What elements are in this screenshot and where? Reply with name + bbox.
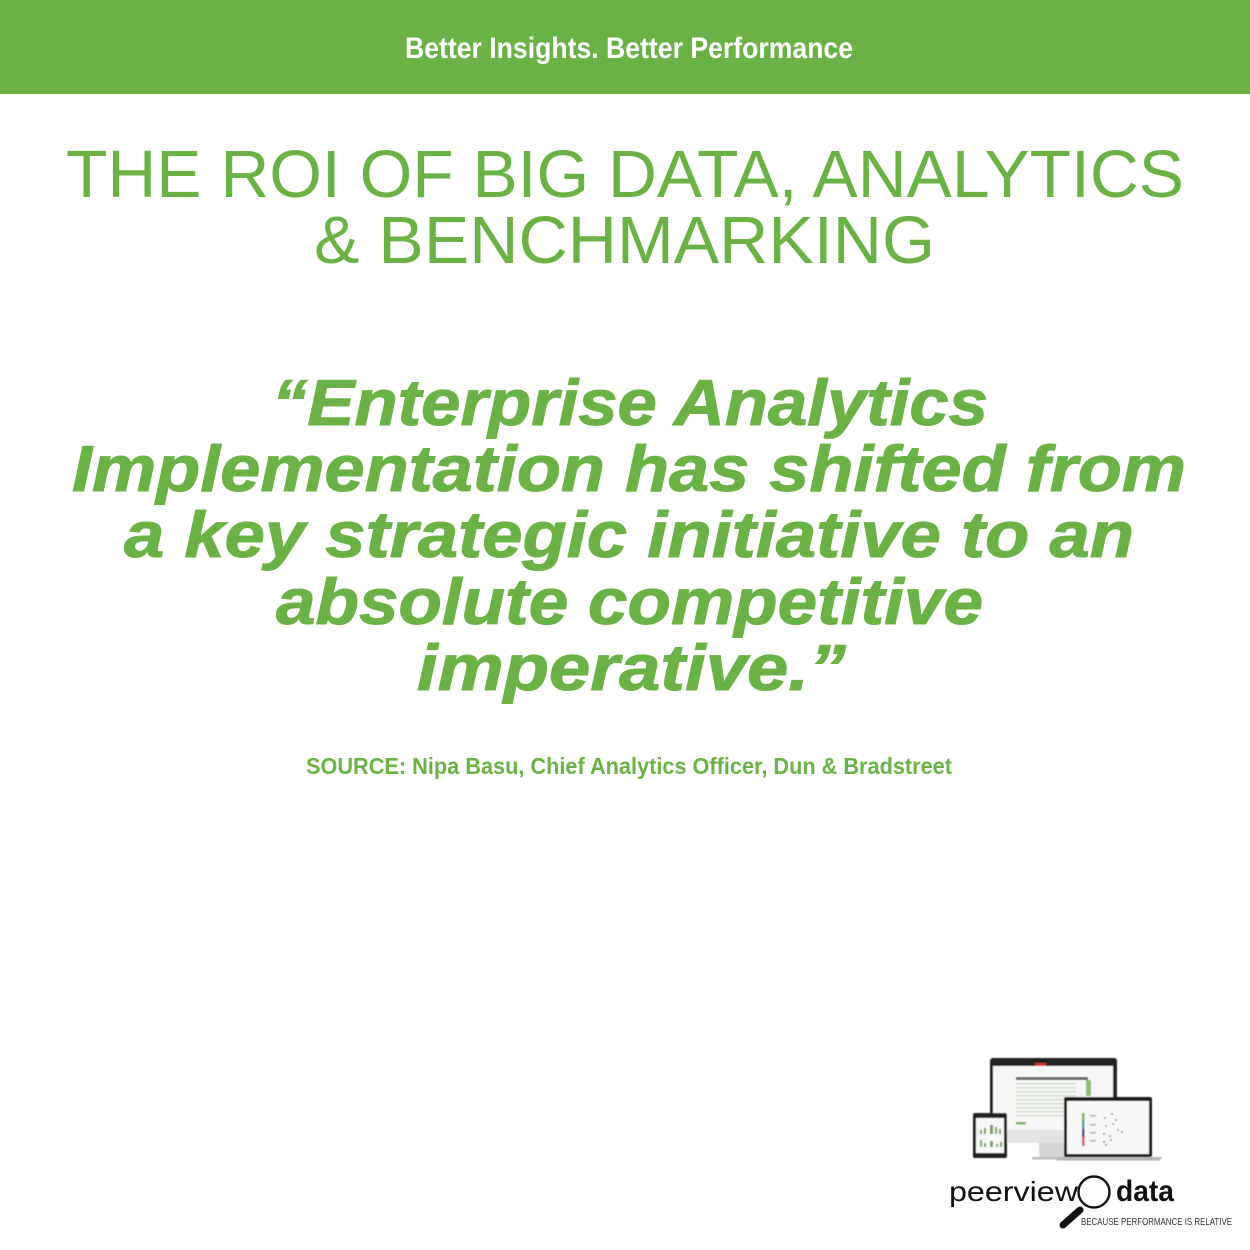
- icon: device mockups: [973, 1058, 1162, 1160]
- title: THE ROI OF BIG DATA, ANALYTICS: [66, 137, 1184, 212]
- title: & BENCHMARKING: [314, 203, 935, 278]
- quote: Implementation has shifted from: [72, 432, 1186, 505]
- logo wordmark: data: data: [1116, 1175, 1174, 1208]
- icon: laptop: [1055, 1097, 1162, 1160]
- header banner: [0, 0, 1250, 94]
- logo: peerview data: [949, 1175, 1232, 1228]
- logo wordmark: peerview: peerview: [949, 1176, 1079, 1207]
- header banner: Better Insights. Better Performance: [405, 32, 853, 65]
- icon: desktop monitor: [990, 1058, 1117, 1160]
- icon: magnifying glass: [1063, 1176, 1110, 1225]
- quote: absolute competitive: [276, 565, 983, 638]
- quote: “Enterprise Analytics: [272, 366, 988, 439]
- quote: a key strategic initiative to an: [124, 498, 1134, 571]
- title: [66, 137, 1184, 278]
- icon: tablet: [973, 1113, 1007, 1158]
- quote: imperative.”: [417, 631, 847, 704]
- quote: [72, 366, 1186, 704]
- source line: SOURCE: Nipa Basu, Chief Analytics Officer, Dun & Bradstreet: [306, 753, 952, 779]
